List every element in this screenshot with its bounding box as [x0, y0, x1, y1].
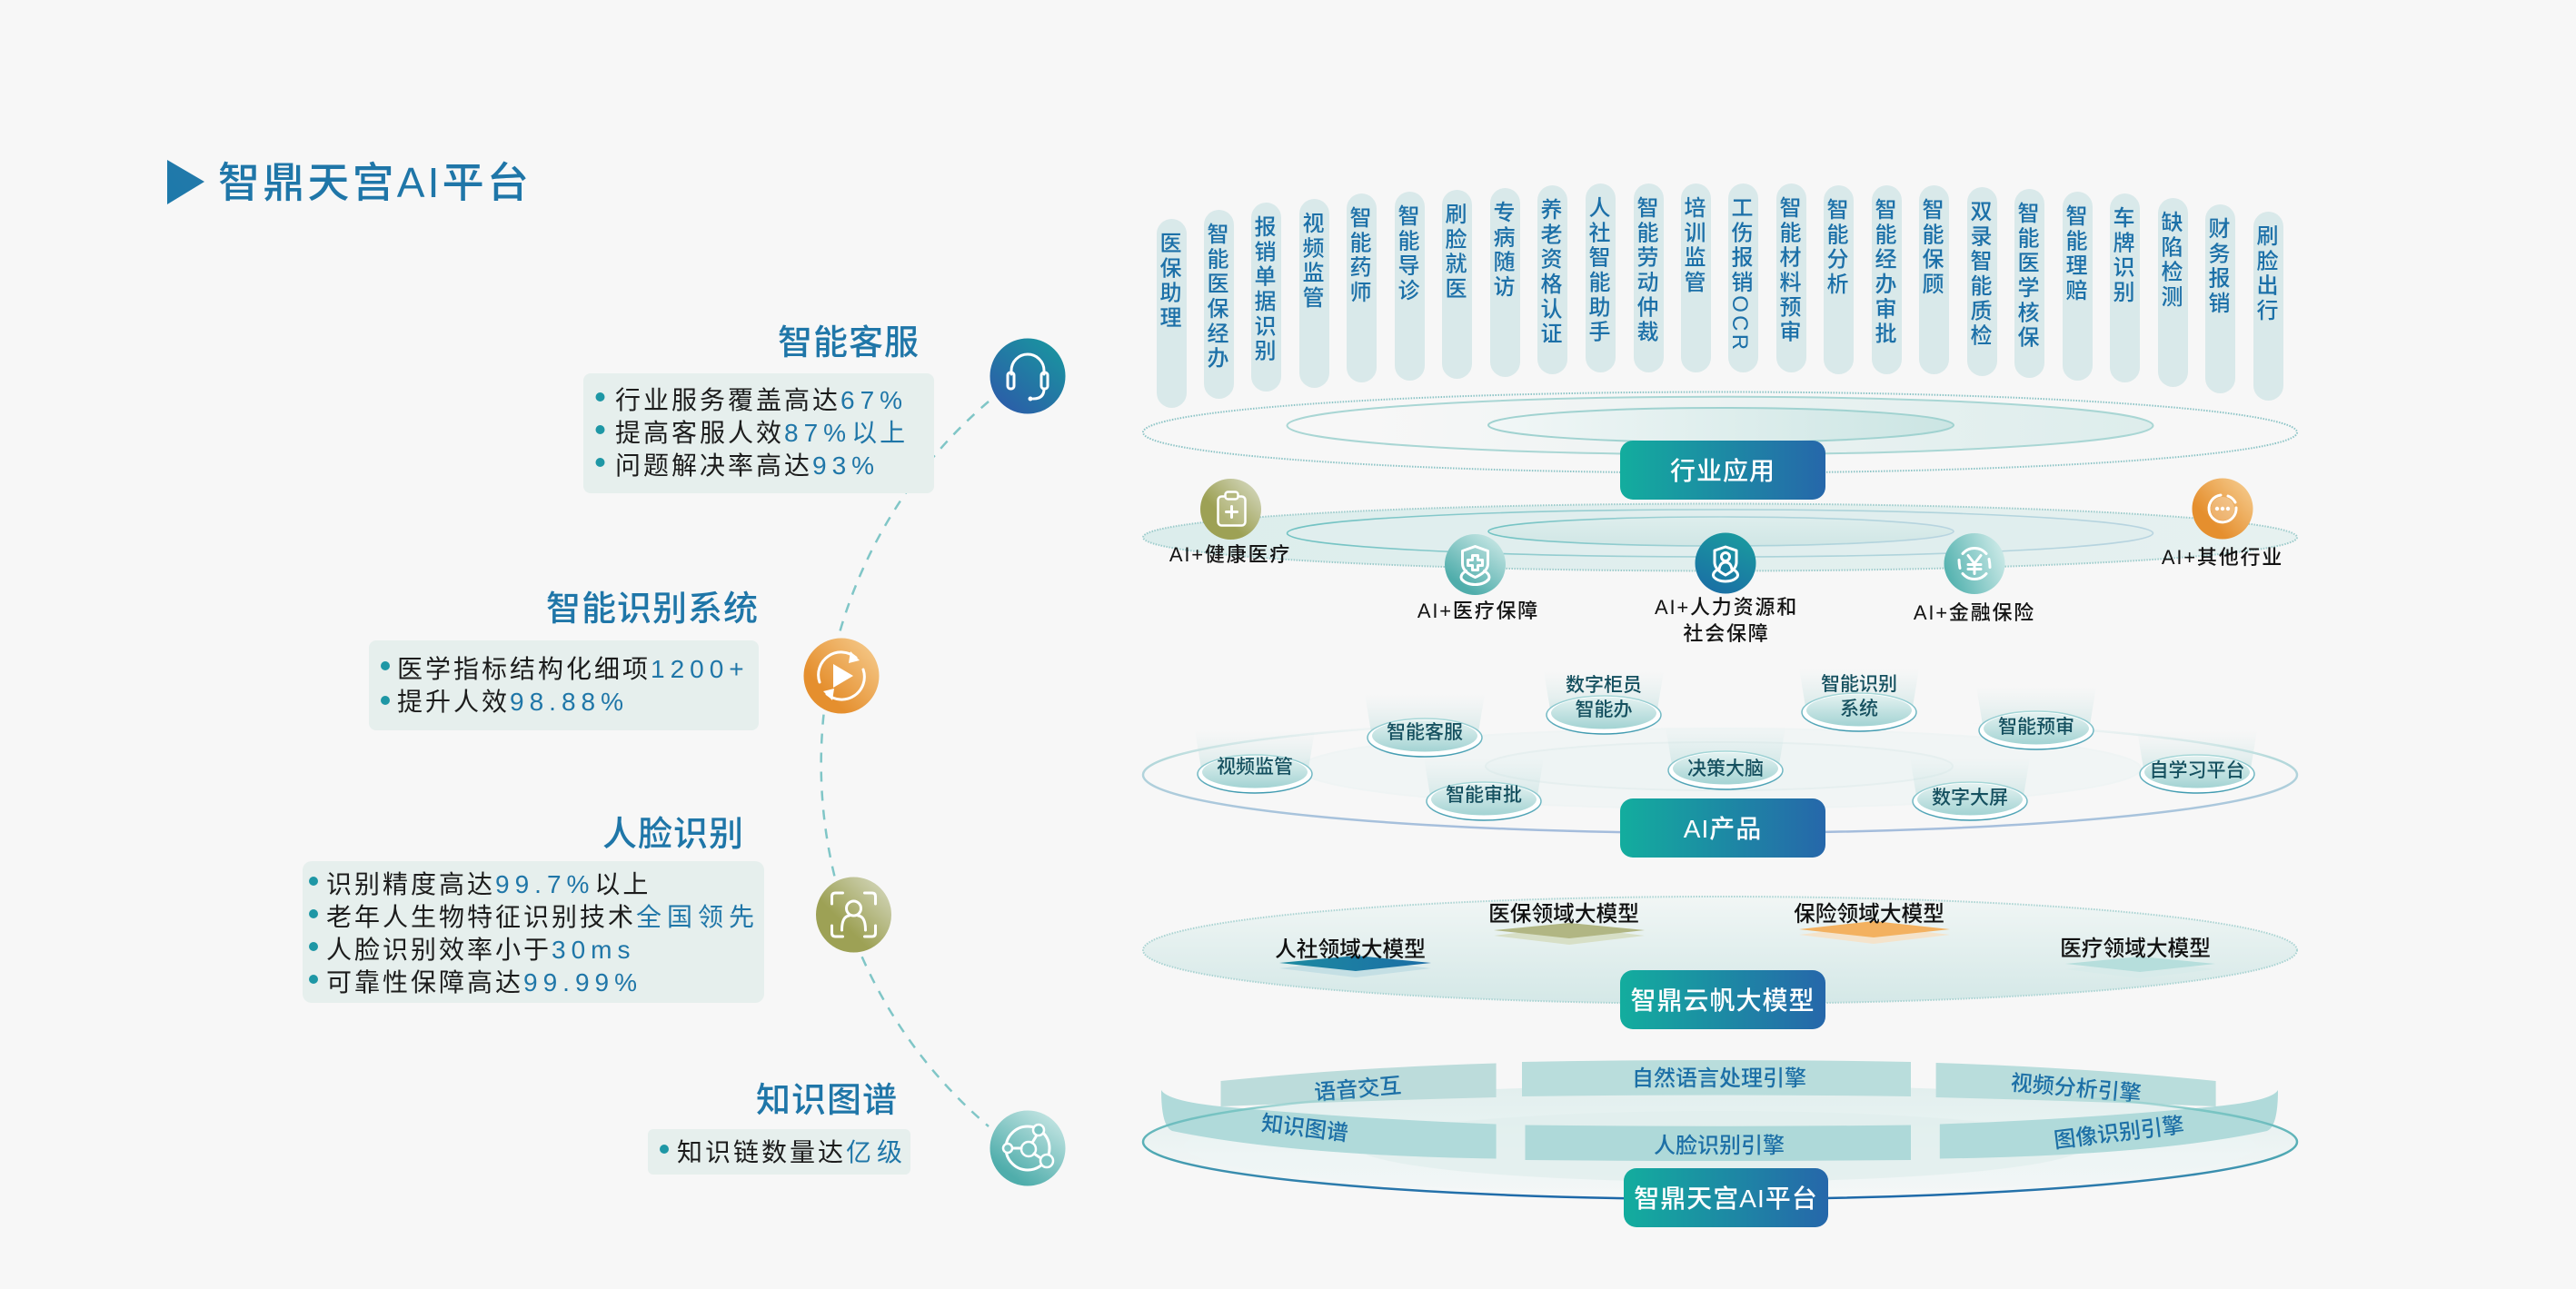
industry: AI+医疗保障: AI+医疗保障	[1417, 600, 1539, 622]
platform rings: AI+ industries	[1143, 503, 2297, 570]
panel: 行业应用 pills: 财务报销	[2204, 217, 2230, 316]
panel: 图像识别引擎: 图像识别引擎	[2053, 1113, 2185, 1154]
panel: 图像识别引擎	[1940, 1090, 2278, 1159]
panel: 知识图谱	[1161, 1090, 1497, 1159]
icon: cycle play	[802, 637, 880, 715]
icon: network	[989, 1109, 1067, 1187]
product: 自学习平台: 自学习平台	[2150, 760, 2244, 781]
icon: face scan	[814, 876, 892, 954]
panel: 自然语言处理引擎: 自然语言处理引擎	[1632, 1066, 1806, 1091]
panel: 行业应用 pills: 双录智能质检	[1966, 200, 1992, 349]
product discs	[1195, 669, 2257, 820]
panel: 行业应用 pills: 刷脸出行	[2253, 224, 2278, 323]
industry: AI+健康医疗: AI+健康医疗	[1169, 543, 1291, 566]
panel: 语音交互: 语音交互	[1313, 1074, 1402, 1106]
product: 数字大屏: 数字大屏	[1932, 788, 2008, 808]
icon: chat dots	[2192, 478, 2253, 540]
panel: 行业应用 pills: 刷脸就医	[1441, 203, 1467, 302]
product: 数字柜员智能办: 智能办	[1576, 699, 1632, 720]
product: 数字柜员智能办	[1544, 671, 1664, 734]
industry: AI+人力资源和社会保障	[1655, 532, 1798, 645]
stat box: 老年人生物特征识别技术全国领先	[326, 903, 760, 931]
stat box: 识别精度高达99.7%以上	[326, 870, 651, 898]
button: 智鼎云帆大模型: 智鼎云帆大模型	[1630, 987, 1815, 1015]
model: 医疗领域大模型	[2060, 937, 2215, 978]
platform: 智鼎天宫AI平台 base	[1143, 1085, 2297, 1199]
icon: shield person	[1696, 532, 1755, 594]
panel: 行业应用 pills: 医保助理	[1156, 232, 1181, 331]
button: 智鼎天宫AI平台: 智鼎天宫AI平台	[1634, 1185, 1818, 1213]
stat box: 提高客服人效87%以上	[615, 419, 908, 447]
model: 保险领域大模型	[1794, 902, 1950, 944]
panel: 人脸识别引擎	[1525, 1125, 1911, 1161]
product: 视频监管: 视频监管	[1217, 757, 1293, 778]
product: 数字大屏	[1910, 758, 2030, 820]
product: 智能预审: 智能预审	[1998, 717, 2074, 738]
panel: 视频分析引擎	[1936, 1063, 2216, 1106]
panel: 行业应用 pills: 缺陷检测	[2157, 211, 2183, 310]
feature: 智能识别系统	[369, 590, 880, 730]
icon: clipboard	[1200, 479, 1261, 540]
panel: 行业应用 pills: 人社智能助手	[1585, 196, 1610, 345]
product: 智能审批	[1424, 758, 1544, 820]
feature: 知识图谱	[648, 1082, 1067, 1187]
panel: 行业应用 pills: 智能材料预审	[1775, 196, 1801, 345]
heading: 人脸识别	[602, 816, 744, 854]
product: 智能客服	[1365, 694, 1485, 757]
panel: 行业应用 pills: 报销单据识别	[1250, 215, 1276, 364]
industry: AI+其他行业: AI+其他行业	[2162, 546, 2283, 569]
stat box: 知识链数量达亿级	[677, 1138, 908, 1166]
stat box	[303, 861, 764, 1003]
panel: 行业应用 pills: 智能劳动仲裁	[1633, 196, 1658, 345]
dashed connector arc	[821, 402, 989, 1126]
panel: 行业应用 pills: 智能理赔	[2062, 204, 2087, 303]
product: 智能审批: 智能审批	[1446, 785, 1522, 806]
platform rings: AI产品	[1143, 717, 2297, 833]
panel: 行业应用 pills: 智能导诊	[1394, 204, 1419, 303]
panel: 知识图谱: 知识图谱	[1260, 1111, 1349, 1146]
panel: 行业应用 pills: 视频监管	[1298, 212, 1324, 311]
product: 智能识别系统	[1799, 669, 1919, 731]
title: 智鼎天宫AI平台	[218, 159, 532, 206]
stat box	[369, 640, 759, 730]
model: 医疗领域大模型: 医疗领域大模型	[2060, 937, 2211, 961]
panel: 视频分析引擎: 视频分析引擎	[2010, 1071, 2143, 1106]
icon: yen cycle	[1944, 533, 2004, 594]
industry: AI+金融保险	[1914, 533, 2035, 624]
button: 行业应用: 行业应用	[1670, 457, 1775, 485]
panel: 行业应用 pills: 智能保顾	[1918, 198, 1944, 297]
industry: AI+人力资源和社会保障: AI+人力资源和	[1655, 596, 1798, 619]
button: 智鼎天宫AI平台	[1624, 1168, 1828, 1227]
product: 决策大脑	[1666, 727, 1785, 789]
model: 医保领域大模型	[1488, 902, 1645, 945]
product: 智能识别系统: 智能识别	[1821, 674, 1897, 695]
stat box: 提升人效98.88%	[397, 688, 629, 716]
stat box: 人脸识别效率小于30ms	[326, 936, 635, 964]
industry: AI+人力资源和社会保障: 社会保障	[1683, 622, 1770, 645]
product: 智能预审	[1976, 687, 2096, 749]
industry: AI+金融保险: AI+金融保险	[1914, 601, 2035, 624]
icon: shield cross	[1445, 534, 1506, 595]
button: AI产品	[1620, 798, 1825, 858]
industry: AI+健康医疗	[1169, 479, 1291, 566]
panel: 行业应用 pills: 智能分析	[1823, 198, 1848, 297]
product: 视频监管	[1195, 730, 1315, 793]
panel: 行业应用 pills: 养老资格认证	[1537, 198, 1562, 347]
button: 行业应用	[1620, 441, 1825, 500]
platform rings: 行业应用	[1143, 392, 2297, 472]
panel: 行业应用 pills: 工伤报销OCR	[1727, 196, 1753, 352]
product: 数字柜员智能办: 数字柜员	[1566, 675, 1642, 696]
industry: AI+其他行业	[2162, 478, 2283, 569]
stat box	[648, 1129, 910, 1175]
model: 人社领域大模型	[1275, 937, 1431, 977]
panel: 行业应用 pills: 智能医保经办	[1203, 223, 1228, 372]
industry: AI+医疗保障	[1417, 534, 1539, 622]
stat box: 医学指标结构化细项1200+	[397, 655, 750, 683]
product: 决策大脑: 决策大脑	[1687, 759, 1764, 779]
panel: 行业应用 pills	[1156, 183, 2283, 408]
panel: 自然语言处理引擎	[1522, 1060, 1911, 1096]
model: 保险领域大模型: 保险领域大模型	[1794, 902, 1944, 927]
stat box: 行业服务覆盖高达67%	[615, 386, 908, 414]
stat box: 问题解决率高达93%	[615, 451, 880, 480]
panel: 行业应用 pills: 智能经办审批	[1871, 198, 1896, 347]
icon: headset	[989, 337, 1067, 415]
platform ring outline	[1143, 1085, 2297, 1199]
button: AI产品: AI产品	[1684, 815, 1762, 843]
button: 智鼎云帆大模型	[1620, 970, 1825, 1029]
product: 自学习平台	[2137, 730, 2257, 793]
model: 医保领域大模型: 医保领域大模型	[1488, 902, 1639, 927]
heading: 知识图谱	[756, 1082, 898, 1120]
model: 人社领域大模型: 人社领域大模型	[1275, 937, 1426, 962]
feature: 人脸识别	[303, 816, 892, 1003]
heading: 智能客服	[778, 324, 920, 362]
panel: 行业应用 pills: 车牌识别	[2109, 206, 2134, 305]
product: 智能客服: 智能客服	[1387, 722, 1463, 743]
panel: 行业应用 pills: 智能药师	[1346, 206, 1371, 305]
panel: 人脸识别引擎: 人脸识别引擎	[1654, 1134, 1785, 1158]
stat box: 可靠性保障高达99.99%	[326, 968, 642, 996]
panel: 语音交互	[1221, 1063, 1497, 1106]
panel: 行业应用 pills: 专病随访	[1489, 201, 1515, 300]
feature: 智能客服	[583, 324, 1067, 493]
stat box	[583, 373, 934, 493]
platform: 智鼎云帆大模型	[1143, 897, 2297, 1004]
panel: 行业应用 pills: 培训监管	[1680, 196, 1706, 295]
panel: 行业应用 pills: 智能医学核保	[2014, 202, 2039, 351]
heading: 智能识别系统	[546, 590, 759, 629]
engine ring panels	[1161, 1060, 2278, 1161]
product: 智能识别系统: 系统	[1840, 699, 1878, 719]
